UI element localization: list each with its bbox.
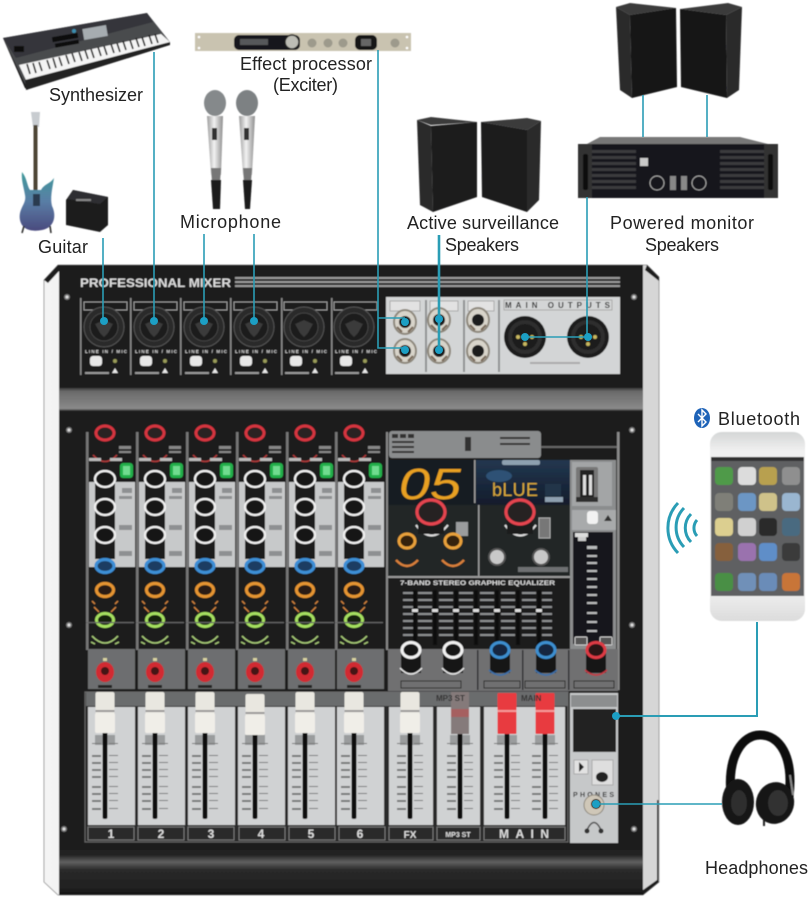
label: effect processor: Effect processor: [240, 54, 372, 74]
panel: graphic equalizer: [388, 576, 570, 650]
heading: professional mixer: PROFESSIONAL MIXER: [80, 278, 232, 290]
panel: effect display and controls: [388, 460, 570, 577]
input channel jacks: LINE IN / MIC: [235, 349, 278, 354]
chamfer corners: [44, 265, 659, 895]
label: synthesizer: Synthesizer: [49, 85, 143, 105]
sloped grey band: [59, 388, 643, 411]
fader numbers: 2: [158, 827, 165, 841]
icon: bluetooth badge: [694, 408, 710, 428]
input channel jacks: LINE IN / MIC: [335, 349, 378, 354]
label: exciter: (Exciter): [273, 75, 338, 95]
fader numbers: FX: [404, 830, 417, 841]
label: microphone: Microphone: [180, 212, 281, 232]
icon: powered speakers: [616, 3, 742, 98]
icon: active speakers: [417, 117, 541, 212]
icon: microphones: [204, 90, 258, 209]
fader numbers: MP3 ST: [445, 832, 471, 839]
fader numbers: 3: [208, 827, 215, 841]
icon: guitar amplifier: [66, 190, 108, 232]
fader numbers: [88, 694, 565, 841]
connection dots: [100, 315, 620, 808]
label: main outputs: MAIN OUTPUTS: [505, 301, 611, 310]
label: phones: PHONES: [573, 792, 614, 799]
icon: power amplifier: [578, 137, 778, 198]
icon: synthesizer: [3, 13, 170, 90]
heading stripes: [235, 277, 620, 287]
heading: equalizer: 7-BAND STEREO GRAPHIC EQUALIZER: [400, 581, 556, 587]
panel: bluetooth and headphone strip: [570, 693, 618, 843]
connection lines: [103, 50, 757, 804]
fader numbers: MAIN: [521, 694, 542, 703]
input channel jacks: LINE IN / MIC: [285, 349, 328, 354]
fader numbers: 5: [308, 827, 315, 841]
icon: effect processor rack: [195, 33, 411, 51]
fader numbers: MP3 ST: [436, 694, 465, 703]
mixer: [44, 265, 659, 895]
bottom shiny edge: [59, 842, 643, 895]
app icon grid: [715, 467, 800, 591]
panel: channel strips 1-6: [86, 426, 388, 706]
label: powered monitor: Powered monitor: [610, 213, 754, 233]
display: preset number: 05: [399, 460, 462, 509]
display: bluetooth LCD: [476, 460, 570, 505]
label: bluetooth: Bluetooth: [718, 409, 800, 429]
label: powered speakers: Speakers: [645, 235, 719, 255]
panel: rear outputs: [386, 297, 620, 374]
panel: fader section: [85, 692, 568, 842]
mixer casing with white side rims: [44, 265, 659, 895]
fader numbers: MAIN: [499, 827, 549, 841]
fader numbers: 6: [357, 827, 364, 841]
label: active speakers: Speakers: [445, 235, 519, 255]
fader caps: [95, 692, 554, 735]
mixer black top face: [59, 265, 643, 895]
label: headphones: Headphones: [705, 858, 808, 878]
input channel jacks: [80, 298, 378, 375]
icon: headphones: [722, 735, 799, 828]
label: guitar: Guitar: [38, 237, 88, 257]
input channel jacks: LINE IN / MIC: [185, 349, 228, 354]
display text: blue: bLUE: [492, 480, 538, 500]
panel: lower knob row: [388, 642, 618, 691]
panel: USB and level meter: [570, 432, 620, 690]
panel: effects table: [389, 431, 617, 458]
fader numbers: 1: [108, 827, 115, 841]
mounting screws: [61, 294, 637, 832]
icon: smartphone: [710, 432, 805, 621]
icon: wireless waves: [668, 503, 697, 553]
fader numbers: 4: [258, 827, 265, 841]
label: active surveillance: Active surveillance: [407, 213, 559, 233]
input channel jacks: LINE IN / MIC: [85, 349, 128, 354]
icon: guitar: [20, 112, 54, 233]
input channel jacks: LINE IN / MIC: [135, 349, 178, 354]
